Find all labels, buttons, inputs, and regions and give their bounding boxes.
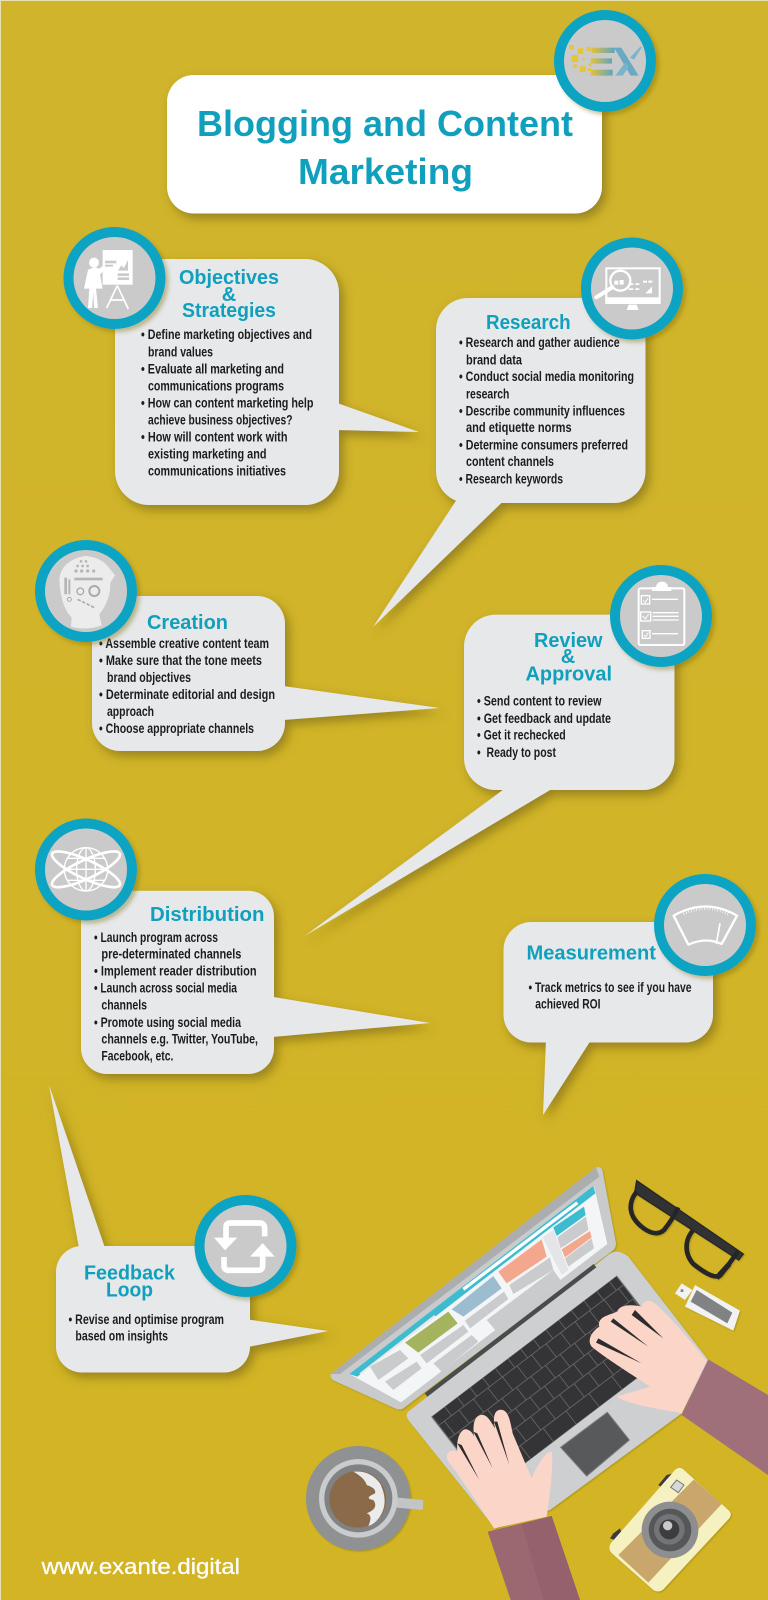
bullet list: • Describe community influences bbox=[459, 403, 625, 418]
bullet list: channels bbox=[101, 998, 147, 1013]
icon: glasses bbox=[631, 1181, 743, 1278]
bullet list: and etiquette norms bbox=[466, 420, 572, 435]
bullet list: • Choose appropriate channels bbox=[99, 721, 254, 736]
bullet list: • Research and gather audience bbox=[459, 335, 620, 350]
bullet list: • Implement reader distribution bbox=[94, 964, 257, 979]
heading: Strategies bbox=[182, 300, 276, 322]
illustration: laptop base bbox=[407, 1252, 708, 1528]
illustration: desk scene bbox=[306, 1167, 768, 1600]
bullet list bbox=[528, 980, 692, 1012]
bullet list: • Promote using social media bbox=[94, 1015, 241, 1030]
heading bbox=[84, 1263, 176, 1302]
bullet list: • Revise and optimise program bbox=[68, 1312, 224, 1327]
heading: & bbox=[561, 646, 575, 668]
bullet list: content channels bbox=[466, 454, 554, 469]
heading: Approval bbox=[526, 664, 612, 686]
icon: globe with orbits bbox=[35, 818, 137, 920]
illustration: right arm and hand bbox=[590, 1301, 768, 1475]
bullet list: communications programs bbox=[148, 378, 284, 394]
bullet list: communications initiatives bbox=[148, 464, 286, 479]
heading: Objectives bbox=[179, 267, 279, 289]
bullet list: • Track metrics to see if you have bbox=[528, 980, 692, 995]
speech bubble bbox=[305, 615, 674, 936]
bullet list: • Launch program across bbox=[94, 930, 218, 945]
bullet list: • Research keywords bbox=[459, 472, 563, 486]
bullet list: channels e.g. Twitter, YouTube, bbox=[101, 1032, 258, 1047]
bullet list: Facebook, etc. bbox=[101, 1049, 173, 1064]
bullet list: based om insights bbox=[75, 1329, 168, 1344]
bullet list: • Send content to review bbox=[477, 694, 602, 709]
bullet list: brand objectives bbox=[107, 670, 191, 685]
speech bubble bbox=[92, 596, 440, 751]
bullet list: • Launch across social media bbox=[94, 980, 237, 996]
bullet list: • Determine consumers preferred bbox=[459, 437, 628, 452]
bullet list: • Get it rechecked bbox=[477, 728, 566, 743]
bullet list: pre-determinated channels bbox=[101, 947, 241, 962]
bullet list: • Assemble creative content team bbox=[99, 636, 269, 651]
bullet list bbox=[141, 327, 314, 479]
speech bubble bbox=[81, 891, 430, 1074]
title text: Blogging and Content bbox=[197, 103, 573, 144]
bullet list: • Get feedback and update bbox=[477, 711, 611, 726]
icon: head with gears bbox=[35, 540, 137, 642]
icon: presenter at board bbox=[64, 227, 166, 329]
heading: & bbox=[222, 284, 236, 306]
bullet list: • Evaluate all marketing and bbox=[141, 362, 284, 376]
heading: Measurement bbox=[526, 943, 656, 965]
heading bbox=[179, 267, 279, 322]
panel: creation bbox=[92, 596, 440, 751]
bullet list: research bbox=[466, 386, 509, 401]
bullet list bbox=[459, 335, 634, 486]
illustration: trackpad bbox=[561, 1412, 629, 1476]
bullet list: approach bbox=[107, 704, 154, 719]
heading: Research bbox=[486, 312, 571, 334]
panel: feedback loop bbox=[49, 1085, 328, 1372]
bullet list: • Conduct social media monitoring bbox=[459, 369, 634, 384]
bullet list bbox=[94, 930, 258, 1064]
panel: research bbox=[373, 298, 646, 627]
bullet list: • Determinate editorial and design bbox=[99, 687, 275, 702]
heading: Feedback bbox=[84, 1263, 176, 1285]
bullet list bbox=[68, 1312, 224, 1344]
footer url: www.exante.digital bbox=[41, 1554, 240, 1579]
heading: Loop bbox=[106, 1280, 153, 1302]
speech bubble bbox=[504, 922, 713, 1115]
illustration: left arm and hand bbox=[447, 1410, 580, 1600]
bullet list: achieved ROI bbox=[535, 997, 600, 1012]
icon: EX logo badge bbox=[554, 10, 656, 112]
illustration: laptop lid and screen bbox=[330, 1167, 616, 1409]
panel: distribution bbox=[81, 891, 430, 1074]
title text: Marketing bbox=[298, 151, 473, 192]
bullet list: brand values bbox=[148, 344, 213, 360]
panel: measurement bbox=[504, 922, 713, 1115]
bullet list: • Make sure that the tone meets bbox=[99, 653, 262, 668]
speech bubble bbox=[115, 259, 419, 505]
heading: Creation bbox=[147, 612, 228, 634]
bullet list bbox=[99, 636, 275, 736]
bullet list: brand data bbox=[466, 352, 522, 367]
heading: Distribution bbox=[150, 904, 264, 926]
bullet list: achieve business objectives? bbox=[148, 412, 292, 428]
icon: coffee cup bbox=[306, 1446, 423, 1551]
illustration: keyboard bbox=[432, 1276, 674, 1491]
bullet list: • Define marketing objectives and bbox=[141, 327, 312, 342]
icon: USB drive bbox=[675, 1283, 740, 1331]
bullet list: • Ready to post bbox=[477, 745, 556, 760]
speech bubble bbox=[49, 1085, 328, 1372]
bullet list: • How will content work with bbox=[141, 430, 288, 444]
heading: Review bbox=[534, 630, 603, 652]
panel: review and approval bbox=[305, 615, 674, 936]
heading bbox=[526, 630, 612, 686]
title text bbox=[197, 103, 573, 192]
icon: clipboard checklist bbox=[610, 565, 712, 667]
icon: camera bbox=[609, 1468, 731, 1592]
bullet list: • How can content marketing help bbox=[141, 396, 314, 410]
icon: weighing scale dial bbox=[654, 874, 756, 976]
icon: monitor with magnifier bbox=[581, 238, 683, 340]
bullet list bbox=[477, 694, 611, 760]
speech bubble bbox=[373, 298, 646, 627]
panel: title bbox=[167, 75, 602, 214]
panel: objectives and strategies bbox=[115, 259, 419, 505]
icon: refresh arrows bbox=[194, 1195, 296, 1297]
bullet list: existing marketing and bbox=[148, 447, 266, 462]
